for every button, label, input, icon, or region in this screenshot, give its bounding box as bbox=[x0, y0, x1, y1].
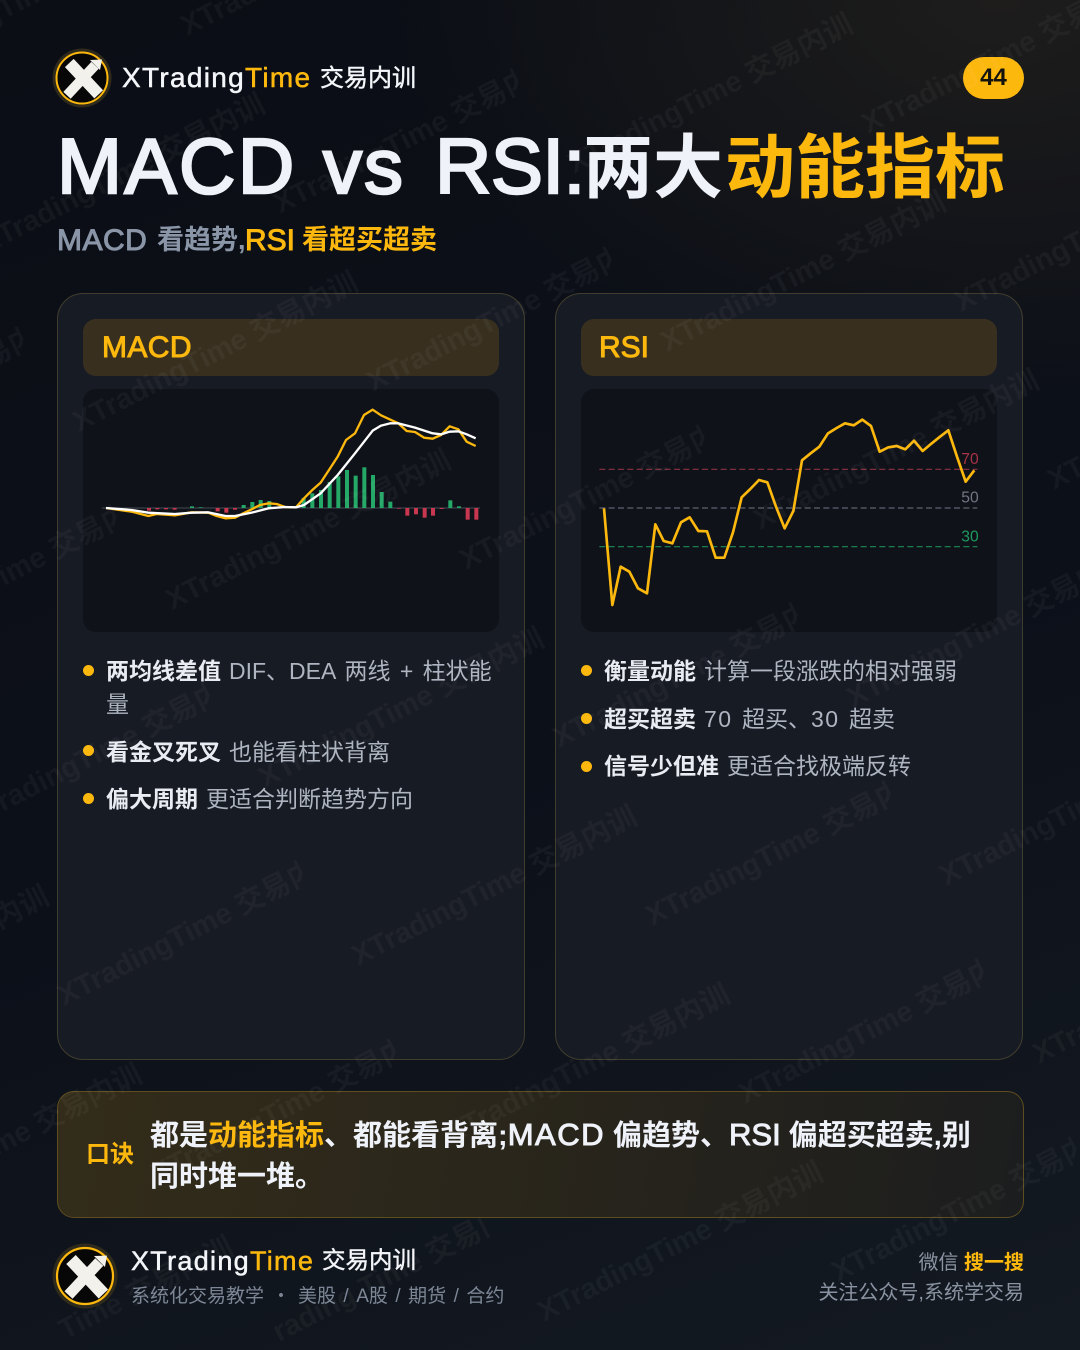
bullet list: RSI bbox=[581, 658, 957, 779]
title: 两大 bbox=[583, 129, 723, 207]
brand name: footer: XTradingTime bbox=[131, 1246, 314, 1276]
footer right: follow line: 关注公众号,系统学交易 bbox=[818, 1282, 1024, 1304]
subtitle bbox=[57, 224, 437, 257]
brand chinese: footer: 交易内训 bbox=[322, 1247, 416, 1273]
logo: footer bbox=[52, 1244, 118, 1308]
page number badge: 44 bbox=[980, 64, 1007, 91]
chart: RSI line with 70/50/30 levels: 70 bbox=[961, 451, 979, 468]
chart panel: MACD bbox=[83, 389, 499, 632]
watermark layer: XTradingTime 交易内训 bbox=[532, 1156, 828, 1328]
bullet list: MACD: 看金叉死叉 也能看柱状背离 bbox=[106, 739, 390, 765]
callout text: 同时堆一堆。 bbox=[150, 1161, 324, 1193]
watermark layer: XTradingTime 交易内训 bbox=[52, 840, 348, 1012]
title: vs bbox=[323, 122, 405, 210]
panel heading: MACD bbox=[83, 319, 499, 376]
title: MACD bbox=[57, 122, 297, 210]
chart: RSI line with 70/50/30 levels: 50 bbox=[961, 490, 979, 507]
brand chinese: header: 交易内训 bbox=[320, 65, 416, 92]
watermark layer: XTradingTime 交易内训 bbox=[361, 226, 657, 398]
panel: MACD bbox=[57, 293, 525, 1060]
watermark layer: XTradingTime 交易内训 bbox=[562, 8, 858, 180]
callout label: 口诀 bbox=[86, 1141, 134, 1168]
watermark layer: XTradingTime 交易内训 bbox=[439, 978, 735, 1150]
title: RSI: bbox=[435, 122, 585, 210]
bullet list: RSI: 信号少但准 更适合找极端反转 bbox=[604, 753, 911, 779]
chart: RSI line with 70/50/30 levels: 30 bbox=[961, 528, 979, 545]
subtitle: RSI bbox=[245, 224, 295, 257]
watermark layer: XTradingTime 交易内训 bbox=[253, 622, 549, 794]
watermark layer: Time 交易内训 bbox=[53, 1230, 239, 1346]
watermark layer: XTradingTime 交易内训 bbox=[733, 938, 1029, 1110]
watermark layer: XTradingTime 交易内训 bbox=[655, 186, 951, 358]
watermark layer: XTradingTime 交易内训 bbox=[160, 444, 456, 616]
watermark layer: XTradingTime 交易内训 bbox=[748, 364, 1044, 536]
watermark layer: XTradingTime 交易内训 bbox=[268, 48, 564, 220]
page number badge bbox=[963, 57, 1024, 99]
title bbox=[57, 122, 1005, 210]
bullet list: MACD bbox=[83, 658, 492, 812]
watermark layer: XTradingTime 交易内训 bbox=[67, 266, 363, 438]
chart: MACD lines and histogram bbox=[102, 408, 480, 520]
footer tagline: 系统化交易教学 ・ 美股 / A股 / 期货 / 合约 bbox=[131, 1286, 504, 1307]
title: 动能指标 bbox=[725, 129, 1005, 207]
panel heading: RSI bbox=[581, 319, 997, 376]
bullet list: MACD: 偏大周期 更适合判断趋势方向 bbox=[106, 786, 413, 812]
chart panel: RSI bbox=[581, 389, 997, 632]
bullet list: MACD: 量 bbox=[106, 691, 129, 717]
callout text: 都是动能指标、都能看背离;MACD 偏趋势、RSI 偏超买超卖,别 bbox=[150, 1117, 971, 1152]
watermark layer: XTradingTime 交易内训 bbox=[454, 404, 750, 576]
logo: header bbox=[52, 48, 112, 108]
bullet list: RSI: 衡量动能 计算一段涨跌的相对强弱 bbox=[604, 658, 957, 684]
panel heading: MACD: MACD bbox=[102, 331, 192, 364]
subtitle: 看趋势, bbox=[157, 225, 246, 255]
callout text bbox=[150, 1117, 971, 1193]
bullet list: RSI: 超买超卖 70 超买、30 超卖 bbox=[604, 706, 895, 732]
brand name: header: XTradingTime bbox=[122, 62, 311, 93]
watermark layer: XTradingTime 交易内训 bbox=[346, 800, 642, 972]
watermark layer: XTradingTime 交易内训 bbox=[640, 760, 936, 932]
panel: RSI bbox=[555, 293, 1023, 1060]
chart: RSI line with 70/50/30 levels bbox=[599, 418, 979, 606]
subtitle: 看超买超卖 bbox=[302, 225, 437, 255]
footer right: wechat search: 微信 搜一搜 bbox=[918, 1252, 1024, 1274]
subtitle: MACD bbox=[57, 224, 147, 257]
watermark layer: XTradingTime 交易内训 bbox=[145, 1018, 441, 1190]
callout: mnemonic bbox=[57, 1091, 1024, 1218]
watermark layer: XTradingTime 交易内训 bbox=[547, 582, 843, 754]
watermark layer: rading Time 交易内训 bbox=[267, 1188, 539, 1348]
bullet list: MACD: 两均线差值 DIF、DEA 两线 + 柱状能 bbox=[106, 658, 492, 684]
panel heading: RSI: RSI bbox=[599, 331, 649, 364]
